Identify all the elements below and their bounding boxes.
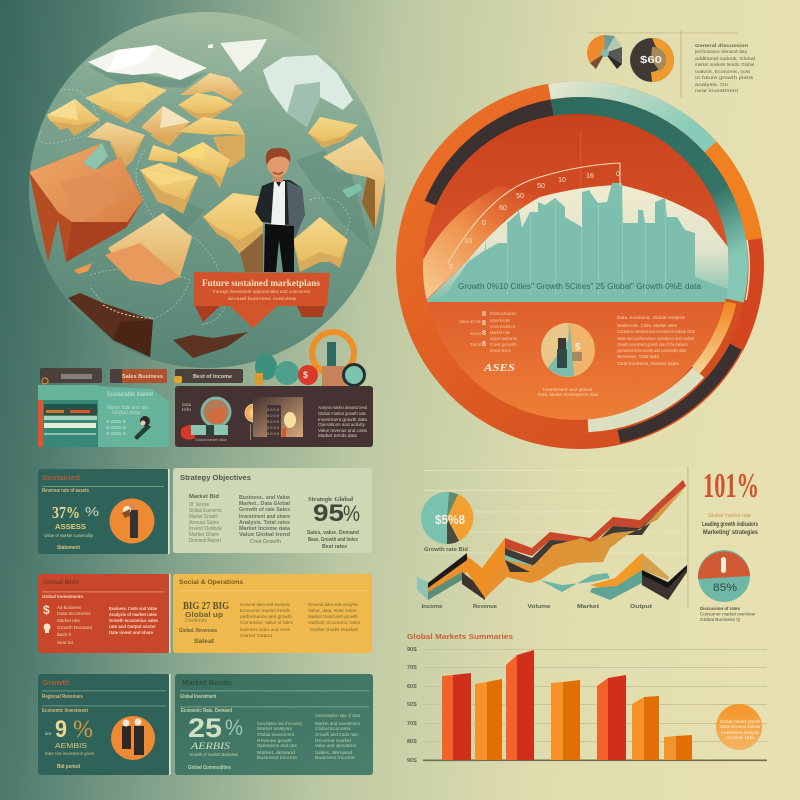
arc scale: 50 bbox=[516, 193, 524, 200]
panel: 95% card: Market Growth bbox=[189, 514, 218, 520]
panel: 25% card: Revenue market bbox=[315, 738, 352, 743]
panel: 37% card: 37% bbox=[52, 503, 80, 522]
panel: 95% card: Strategic Global bbox=[308, 496, 353, 503]
panel: 25% card: % bbox=[225, 715, 243, 740]
panel: 25% card bbox=[175, 674, 373, 775]
tab 3 bbox=[174, 369, 243, 383]
right text block bbox=[617, 315, 695, 366]
tabs row bbox=[40, 368, 243, 384]
lower-left legend: 8 bbox=[482, 311, 486, 318]
route lines bbox=[39, 89, 350, 325]
panel: 25% card: 25 bbox=[188, 713, 222, 743]
right text block: Growth investment growth rate of the markets bbox=[617, 342, 688, 347]
panel: 37% card: Sustained bbox=[42, 473, 80, 482]
ring segments bbox=[434, 89, 755, 437]
panel: yellow card: performance and growth bbox=[240, 614, 292, 620]
panel: red card: Analysis of market rates bbox=[109, 612, 157, 618]
panel: dark card: Investment growth data bbox=[318, 417, 367, 422]
callout circle: Income rate bbox=[726, 735, 755, 740]
banner: annual business overview bbox=[228, 296, 297, 301]
lower-left legend: Value of rate bbox=[459, 319, 481, 324]
panel: 9% card: 9 bbox=[55, 716, 67, 743]
callout circle bbox=[716, 704, 762, 750]
panel: mint card: Sustainable market bbox=[107, 392, 153, 398]
panel: 37% card: Value of market commodity bbox=[44, 533, 94, 538]
panel: 25% card: Growth and trade rate bbox=[315, 732, 358, 737]
panel: 95% card: Invest Outlook bbox=[189, 526, 223, 532]
white continents bbox=[88, 39, 353, 127]
center icon circle bbox=[541, 323, 595, 377]
panel: red card: rate and Output sector bbox=[109, 624, 156, 630]
side note text: outlook. Economic, cost bbox=[695, 69, 751, 74]
panel: 95% card: Market.. Data Global bbox=[239, 501, 291, 507]
panel: 25% card: Market Bonds bbox=[182, 680, 232, 687]
callout circle: Value demand outlook bbox=[720, 724, 761, 729]
panel: 95% card: Strategy Objectives bbox=[180, 475, 251, 482]
x axis labels bbox=[422, 604, 652, 610]
donut with label bbox=[630, 38, 674, 82]
y axis labels: 50S bbox=[407, 702, 417, 708]
panel: 25% card: Revenue growth bbox=[257, 738, 292, 743]
panel: yellow card: General data and analysis bbox=[240, 602, 290, 608]
panel: red card: Back 0 bbox=[57, 632, 71, 638]
chart title: Global Markets Summaries bbox=[407, 632, 513, 641]
panel: 25% card: Economic Rate. Demand bbox=[181, 708, 232, 714]
panel: dark card: Analysis market demand trend bbox=[318, 405, 367, 410]
big stat: Marketing' strategies bbox=[703, 530, 759, 536]
panel: mint card: 0 000 0 bbox=[106, 419, 126, 425]
panel: 95% card: Demand Report bbox=[189, 538, 222, 544]
panel: 25% card: Global Economic bbox=[315, 726, 352, 731]
panel: 25% card: Market, demand bbox=[257, 750, 295, 755]
lower-left legend: 8 bbox=[482, 341, 486, 348]
globe shadows bbox=[88, 66, 372, 249]
banner: Foreign investment opportunities and commerce bbox=[213, 289, 310, 294]
panel: 25% card: Market and investment bbox=[315, 721, 361, 726]
panel: red card: Seat 0d. bbox=[57, 640, 74, 646]
panel: 95% card: Base, Growth and Index bbox=[308, 537, 358, 543]
pie: 85%: Consumer market overview bbox=[700, 612, 756, 616]
panel: 25% card: Business income bbox=[257, 755, 297, 760]
right text block: Total business. Market sales bbox=[617, 361, 680, 366]
side note text: market markets trends. Global bbox=[695, 62, 754, 67]
panel: 9% card: Economic Investment bbox=[42, 708, 88, 714]
globe bbox=[29, 12, 387, 368]
panel: yellow card: Market trend and growth bbox=[308, 614, 358, 620]
panel: 25% card: Market analysis bbox=[257, 726, 293, 731]
panel: 95% card: 95 bbox=[313, 500, 344, 527]
panel: mint card bbox=[38, 385, 169, 447]
icon: team badge bbox=[111, 716, 155, 760]
panel: 95% card: % bbox=[343, 501, 360, 526]
arc scale bbox=[448, 163, 620, 271]
panel: 25% card: AERBIS bbox=[190, 741, 231, 751]
big stat bbox=[702, 466, 759, 536]
panel: 9% card: are bbox=[45, 731, 52, 736]
low-poly yellow tiles bbox=[47, 73, 387, 272]
panel: yellow card: business index and costs bbox=[240, 627, 290, 633]
lower-left legend: operations bbox=[490, 336, 518, 341]
side note text: near investment bbox=[695, 88, 739, 93]
panel: yellow card: General data and analysis bbox=[308, 602, 358, 608]
panel: 25% card: Sales, demand bbox=[315, 750, 352, 755]
y axis labels: 70S bbox=[407, 665, 417, 671]
panel: 95% card: Investment and share bbox=[239, 514, 290, 520]
panel: red card: Market rate bbox=[57, 618, 80, 624]
callout circle: Global market growth bbox=[720, 719, 760, 724]
side note text: analysis. On bbox=[695, 82, 729, 87]
arc scale: 0 bbox=[482, 220, 486, 227]
panel: 95% card: Value Global trend bbox=[239, 532, 290, 538]
panel: red card: Business. Costs and Value bbox=[109, 606, 157, 612]
lower-left legend: Invest share bbox=[490, 348, 511, 353]
big stat: Global market rate bbox=[708, 513, 751, 519]
panel: dark card: Info bbox=[182, 407, 192, 412]
panel: 95% card: Market Income data bbox=[239, 526, 290, 532]
panel: red card: Growth economics sales bbox=[109, 618, 158, 624]
pie: market share: $5%8 bbox=[435, 512, 465, 527]
bottom caption: Data. Market development data bbox=[538, 392, 598, 397]
lower-left legend: commodities bbox=[490, 324, 516, 329]
panel: 95% card: Cost Growth bbox=[250, 539, 281, 545]
dome with skyline bbox=[425, 183, 730, 302]
side note text: performance demand data bbox=[695, 49, 747, 54]
y axis labels bbox=[407, 647, 417, 764]
panel: 25% card: Operations and rate bbox=[257, 743, 297, 748]
panel: 95% card: Best rates bbox=[322, 544, 347, 550]
panel: yellow card: BIG 27 BIG bbox=[183, 600, 229, 612]
panel: yellow card: Dividends bbox=[185, 618, 207, 624]
panel: yellow card: Global up bbox=[185, 612, 223, 619]
panel: yellow card: Economic market trends bbox=[240, 608, 291, 614]
tab 2: Sales Business bbox=[122, 374, 163, 380]
y axis labels: 80S bbox=[407, 739, 417, 745]
panel: yellow card bbox=[173, 574, 372, 653]
panel: 95% card bbox=[173, 468, 372, 553]
center icon circle: $ bbox=[575, 342, 581, 353]
lower-left legend: Discussion bbox=[490, 311, 517, 316]
tab 3: Best of Income bbox=[193, 374, 232, 380]
lower-left legend: 8 bbox=[482, 320, 486, 327]
x axis labels: Market bbox=[577, 604, 599, 610]
panel: dark card: Data bbox=[182, 402, 191, 407]
bars bbox=[442, 650, 692, 760]
panel: red card: Data Economic bbox=[57, 611, 92, 617]
pie: market share bbox=[421, 492, 473, 553]
panel: dark card: 0000 bbox=[267, 419, 280, 424]
panel: 95% card: Market Bid bbox=[189, 494, 219, 500]
panel: 37% card: Revenue rate of assets bbox=[42, 488, 89, 494]
panel: dark card: Operations and activity bbox=[318, 422, 366, 427]
decorative icon cluster bbox=[255, 332, 364, 386]
right text block: Value and performance operations and market bbox=[617, 336, 695, 341]
panel: 9% card: Growth bbox=[42, 678, 70, 687]
panel: 9% card bbox=[38, 674, 171, 775]
arc scale: 50 bbox=[537, 183, 545, 190]
panel: dark card: Market trends data bbox=[318, 433, 357, 438]
side note text: additional outlook. Global bbox=[695, 56, 755, 61]
panel: red card: Ad Business bbox=[57, 605, 81, 611]
panel: 25% card: Global Investment bbox=[180, 694, 216, 700]
panel: yellow card: market Output bbox=[240, 633, 273, 639]
inner disc bbox=[422, 114, 730, 420]
panel: mint card: 0 000 0 bbox=[106, 431, 126, 437]
panel: yellow card: Dollar trade market bbox=[310, 627, 359, 633]
panel: dark card bbox=[175, 386, 373, 447]
arc scale: 10 bbox=[558, 177, 566, 184]
panel: red card: $ bbox=[43, 603, 50, 617]
panel: mint card: Global data bbox=[112, 410, 140, 416]
bar chart bbox=[407, 632, 767, 764]
callout circle: Investment analysis bbox=[721, 730, 760, 735]
panel: 95% card: Annual Sales bbox=[189, 520, 220, 526]
pie: 85%: Discussion of rates bbox=[700, 606, 740, 611]
panel: red card: Growth Demand bbox=[57, 625, 92, 631]
panel: 37% card: ASSESS bbox=[55, 524, 86, 531]
arc scale: 0 bbox=[616, 171, 620, 178]
panel: 9% card: Data rate investment gains bbox=[45, 751, 95, 756]
arc scale: 0 bbox=[449, 264, 453, 271]
panel: 95% card: Growth of rate Sales bbox=[239, 507, 290, 513]
panel: 25% card: Growth of market Business bbox=[189, 752, 239, 757]
big stat: Leading growth indicators bbox=[702, 522, 758, 528]
x axis labels: Income bbox=[422, 604, 443, 610]
panel: 95% card: Market Share bbox=[189, 532, 219, 538]
decorative icon cluster: $ bbox=[303, 370, 308, 380]
banner bbox=[194, 272, 330, 328]
x axis labels: Revenue bbox=[473, 604, 497, 610]
panel: 95% card: Analysis. Total rates bbox=[239, 520, 290, 526]
bottom caption bbox=[538, 387, 598, 397]
right text block: Commerce demand and investment outlook 2016 bbox=[617, 329, 695, 334]
panel: 95% card: Business.. and Value bbox=[239, 495, 290, 501]
lower-left legend: Trend bbox=[470, 342, 481, 347]
top-right mini charts bbox=[587, 31, 755, 97]
panel: 25% card: Consumption rate of economy bbox=[257, 721, 302, 726]
panel: dark card: 0000 bbox=[267, 413, 280, 418]
large circular chart bbox=[396, 81, 764, 449]
ribbons bbox=[417, 480, 687, 600]
panel: yellow card: Outlook, Economic rates bbox=[308, 620, 361, 626]
panel: 25% card: Business income bbox=[315, 755, 355, 760]
lower-left legend: ASES bbox=[483, 362, 515, 374]
tile skirts bbox=[50, 97, 358, 272]
pie: 85% bbox=[698, 550, 756, 622]
y axis labels: 70S bbox=[407, 721, 417, 727]
panel: mint card: 0 000 0 bbox=[106, 425, 126, 431]
orange polygon lands bbox=[29, 143, 192, 285]
panel: dark card: 0000 bbox=[267, 425, 280, 430]
lower-left legend: Cost growth bbox=[490, 342, 517, 347]
line chart bbox=[417, 466, 759, 622]
panel: 95% card: Global Economic bbox=[189, 508, 222, 514]
icon: pen bbox=[134, 416, 151, 440]
panel: 95% card: Of. Service bbox=[189, 502, 209, 508]
panel: yellow card: Social & Operations bbox=[179, 579, 243, 586]
businessman figure bbox=[255, 148, 305, 272]
panel: mint card: Market data and rate bbox=[107, 405, 148, 411]
panel: 25% card: Value and operations bbox=[315, 743, 357, 748]
right text block: Data. Economic. Global Analysis bbox=[617, 315, 686, 320]
panel: 9% card: Regional Revenues bbox=[42, 694, 83, 700]
panel: red card bbox=[38, 574, 170, 653]
lower-left legend: Markets bbox=[490, 318, 511, 323]
panel: 9% card: AEMBIS bbox=[55, 741, 87, 750]
bottom caption: Investment and global bbox=[543, 387, 592, 392]
x axis labels: Volume bbox=[528, 604, 551, 610]
x axis labels: Output bbox=[630, 604, 652, 610]
right text block: operations from activity and commodity data bbox=[617, 348, 686, 353]
panel: red card: Global Bids bbox=[43, 579, 79, 586]
lower-left legend bbox=[459, 311, 518, 374]
pie: market share: Growth rate Bid bbox=[424, 547, 468, 553]
panel: 25% card: Global Commodities bbox=[188, 765, 231, 771]
panel: yellow card: Global. Revenues bbox=[179, 628, 217, 634]
y axis labels: 60S bbox=[407, 684, 417, 690]
arc scale: 60 bbox=[499, 205, 507, 212]
brown landmass bbox=[68, 293, 248, 358]
right text block: Revenue. Total data bbox=[617, 354, 659, 359]
panel: 9% card: % bbox=[73, 716, 93, 743]
panel: yellow card: Value, data. Rate sales bbox=[308, 608, 357, 614]
panel: yellow card: Commerce, Value of rates bbox=[240, 620, 294, 626]
y axis labels: 90S bbox=[407, 758, 417, 764]
arc scale: 10 bbox=[464, 238, 472, 245]
panel: 25% card: Global investment bbox=[257, 732, 295, 737]
right text block: Market rate. Cities. Market rates bbox=[617, 323, 678, 328]
y axis labels: 90S bbox=[407, 647, 417, 653]
side note text: or future growth plans bbox=[695, 75, 754, 80]
panel: dark card: 0000 bbox=[267, 431, 280, 436]
side note text bbox=[695, 43, 755, 93]
panel: 37% card: % bbox=[85, 504, 100, 519]
panel: dark card: Global market growth rate bbox=[318, 411, 366, 416]
donut with label: $60 bbox=[640, 55, 663, 66]
panel: red card: Date invest and share bbox=[109, 630, 153, 636]
lower-left legend: 8 bbox=[482, 330, 486, 337]
big stat: 101% bbox=[703, 466, 759, 505]
panel: dark card: 0000 bbox=[267, 407, 280, 412]
tab 1 bbox=[40, 368, 102, 384]
dome with skyline: Growth 0%10 Cities" Growth 5Cities" 25 Global" Growth 0%E data bbox=[458, 282, 702, 291]
lower-left legend: Market rate bbox=[490, 330, 510, 335]
small pie bbox=[587, 35, 622, 69]
panel: 95% card: Sales, value. Demand bbox=[307, 530, 359, 536]
panel: red card: Global Investments bbox=[42, 594, 83, 600]
tab 2 bbox=[110, 369, 167, 383]
side note text: General discussion bbox=[695, 43, 748, 48]
arc scale: 16 bbox=[586, 173, 594, 180]
icon: person badge bbox=[110, 498, 154, 544]
pie: 85%: 85% bbox=[713, 582, 737, 594]
panel: 25% card: Consumption rate of data bbox=[315, 713, 360, 718]
panel: 37% card bbox=[38, 469, 170, 554]
panel: dark card: Value revenue and costs bbox=[318, 428, 368, 433]
panel: 9% card: Bid period bbox=[57, 764, 80, 770]
panel: yellow card: Saleat bbox=[194, 639, 214, 645]
panel: dark card: Global market value bbox=[195, 438, 227, 442]
panel: 37% card: Statement bbox=[57, 545, 80, 551]
lower-left legend: Invest bbox=[470, 331, 482, 336]
banner: Future sustained marketplans bbox=[202, 278, 320, 288]
pie: 85%: Global Business Q bbox=[700, 617, 740, 622]
